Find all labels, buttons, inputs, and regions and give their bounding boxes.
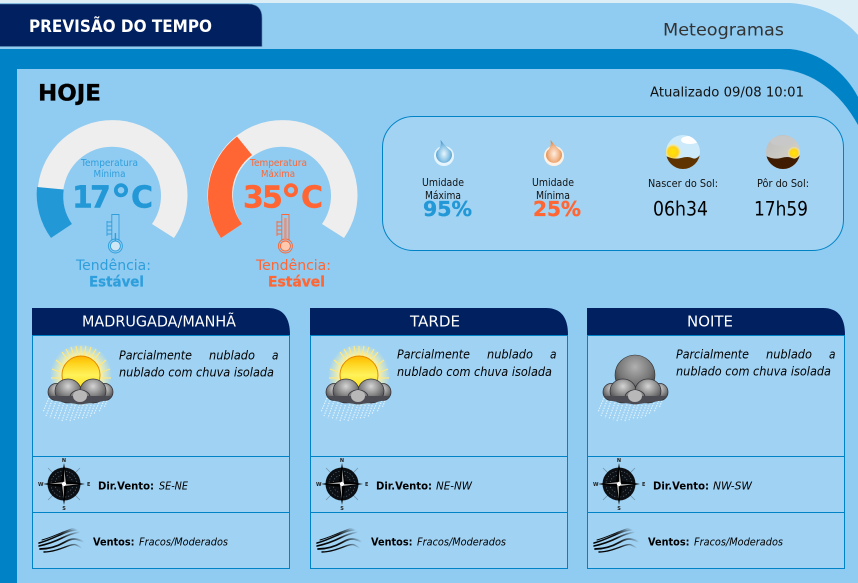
wind strength <box>371 535 506 548</box>
humidity min <box>532 177 581 221</box>
icon: compass rose <box>593 458 646 512</box>
description: Parcialmente <box>676 347 749 361</box>
gauge: minimum temperature: Temperatura <box>80 158 138 169</box>
panel: tarde <box>310 308 568 568</box>
gauge: minimum temperature: ° <box>110 176 132 225</box>
wind strength <box>93 535 228 548</box>
wind direction: NE-NW <box>436 479 473 492</box>
icon: thermometer <box>277 214 292 253</box>
meteogramas link: Meteogramas <box>663 20 784 40</box>
sunset time: Pôr do Sol: <box>757 178 809 190</box>
panel: humidity and sun times <box>382 116 844 250</box>
description: nublado <box>487 348 533 362</box>
wind strength: Fracos/Moderados <box>694 535 783 548</box>
sunset time: 17h59 <box>754 198 808 220</box>
icon: sunrise <box>665 135 700 170</box>
wind strength: Ventos: <box>93 535 134 548</box>
gauge: maximum temperature: ° <box>280 176 302 225</box>
wind strength: Fracos/Moderados <box>139 535 228 548</box>
title tab <box>0 4 262 46</box>
wind direction <box>653 479 753 492</box>
gauge: maximum temperature: 35 <box>243 180 283 216</box>
description: a <box>272 348 278 362</box>
heading: NOITE <box>687 312 733 330</box>
wind strength: Ventos: <box>371 535 412 548</box>
wind direction: Dir.Vento: <box>376 479 432 492</box>
description: a <box>550 348 556 362</box>
description <box>119 348 278 380</box>
gauge: maximum temperature: Máxima <box>261 168 295 180</box>
description: Parcialmente <box>119 348 192 362</box>
title: PREVISÃO DO TEMPO <box>29 14 212 37</box>
icon: sun with rain cloud <box>43 344 113 421</box>
humidity min: 25% <box>533 197 581 221</box>
heading: TARDE <box>409 312 460 330</box>
sunrise time <box>648 178 718 220</box>
icon: wind <box>317 529 362 552</box>
gauge: minimum temperature: Mínima <box>94 168 126 180</box>
humidity min: Umidade <box>532 177 574 189</box>
panel: noite <box>587 308 845 568</box>
description <box>397 348 556 379</box>
description: nublado com chuva isolada <box>676 365 831 379</box>
humidity max: Umidade <box>422 177 464 189</box>
humidity max: Máxima <box>425 190 461 202</box>
humidity max <box>422 177 472 221</box>
description: nublado com chuva isolada <box>397 365 552 379</box>
icon: wind <box>39 529 84 552</box>
wind direction <box>98 479 188 492</box>
description <box>676 347 836 379</box>
humidity min: Mínima <box>536 190 570 202</box>
wind strength: Ventos: <box>648 535 690 548</box>
icon: wind <box>594 529 639 552</box>
heading: hoje: HOJE <box>38 82 101 106</box>
heading: MADRUGADA/MANHÃ <box>82 312 236 330</box>
wind direction: Dir.Vento: <box>653 479 709 492</box>
updated timestamp: Atualizado 09/08 10:01 <box>650 86 804 100</box>
description: Parcialmente <box>397 348 470 362</box>
icon: thermometer <box>107 214 122 253</box>
wind direction <box>376 479 473 492</box>
wind strength <box>648 535 783 548</box>
wind direction: NW-SW <box>713 479 753 492</box>
wind direction: SE-NE <box>159 479 188 492</box>
gauge: maximum temperature: Tendência: <box>255 258 331 274</box>
panel: madrugada/manhã <box>32 308 290 568</box>
gauge: minimum temperature: Estável <box>89 274 144 290</box>
icon: blue water drop <box>434 140 454 166</box>
sunrise time: Nascer do Sol: <box>648 178 718 190</box>
wind direction: Dir.Vento: <box>98 479 154 492</box>
wind strength: Fracos/Moderados <box>417 535 506 548</box>
icon: sun with rain cloud <box>321 344 391 421</box>
humidity max: 95% <box>423 197 472 221</box>
icon: compass rose <box>38 458 91 512</box>
icon: moon with rain cloud <box>598 355 668 421</box>
gauge: maximum temperature <box>207 120 358 290</box>
gauge: minimum temperature: Tendência: <box>75 258 151 274</box>
sunrise time: 06h34 <box>653 198 708 220</box>
description: a <box>829 347 836 361</box>
gauge: minimum temperature: 17 <box>72 180 111 216</box>
description: nublado com chuva isolada <box>119 366 274 380</box>
sunset time <box>754 178 809 220</box>
gauge: minimum temperature <box>37 120 188 290</box>
description: nublado <box>209 348 255 362</box>
gauge: maximum temperature: Temperatura <box>249 158 307 169</box>
icon: sunset <box>766 135 800 170</box>
description: nublado <box>766 347 812 361</box>
gauge: minimum temperature: C <box>131 180 153 216</box>
gauge: maximum temperature: C <box>301 180 323 216</box>
gauge: maximum temperature: Estável <box>268 274 325 290</box>
icon: orange water drop <box>544 140 564 166</box>
icon: compass rose <box>316 458 369 512</box>
